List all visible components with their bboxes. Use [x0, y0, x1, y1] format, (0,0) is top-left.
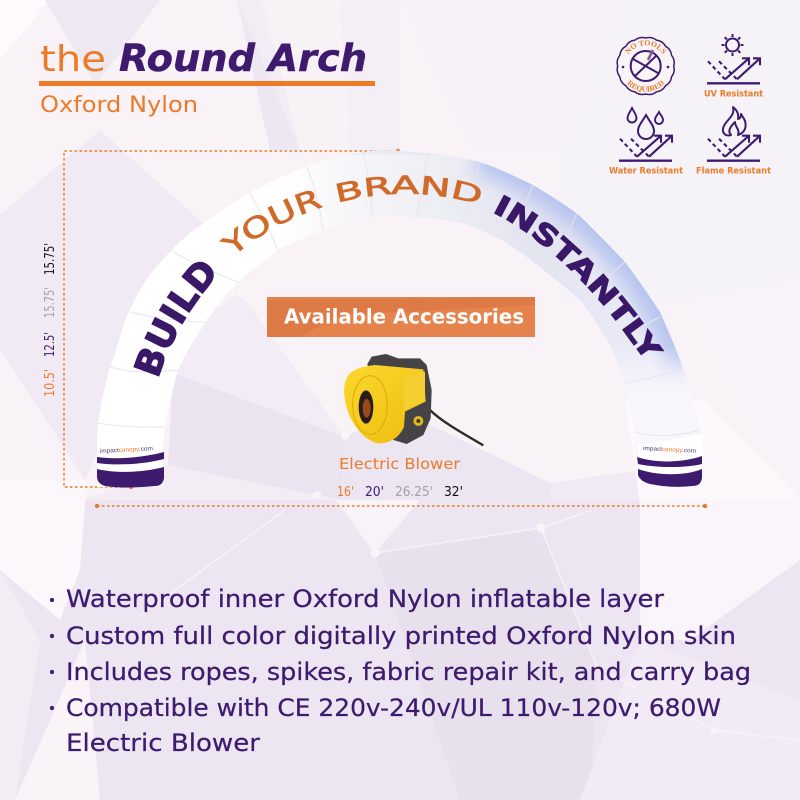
blower body [367, 354, 432, 444]
bullet 3: Includes ropes, spikes, fabric repair kit, and carry bag [66, 658, 751, 686]
height labels: 15.75' [43, 243, 58, 275]
blower housing [344, 365, 426, 443]
accessory label: Electric Blower [339, 455, 461, 473]
feature list [50, 585, 751, 757]
accessories banner: Available Accessories [284, 304, 524, 328]
icon: UV resistant [704, 34, 763, 100]
icon: flame resistant: Flame Resistant [696, 166, 771, 176]
left foot base [97, 467, 164, 488]
blower inlet [359, 390, 373, 424]
right foot url: impactcanopy.com [643, 446, 696, 455]
height labels: 12.5' [43, 332, 58, 357]
icon: flame resistant [696, 107, 771, 176]
length labels [337, 485, 463, 500]
length labels: 26.25' [395, 485, 433, 500]
blower switch [413, 416, 423, 426]
bullet 1: Waterproof inner Oxford Nylon inflatable layer [66, 585, 664, 613]
dimension lines [64, 151, 705, 506]
bullet 4 [50, 694, 721, 757]
icon: no tools required badge: NO TOOLS [624, 40, 666, 54]
arch text: BRAND: BRAND [336, 175, 481, 202]
height labels: 15.75' [43, 287, 58, 318]
dimension end dots [95, 149, 707, 508]
arch text: INSTANTLY: INSTANTLY [494, 194, 664, 356]
right foot stripe [637, 456, 702, 467]
subtitle: Oxford Nylon [40, 93, 198, 118]
blower housing rings [353, 376, 387, 434]
length labels: 32' [444, 485, 463, 500]
right foot base [638, 469, 702, 487]
blower image [344, 354, 483, 445]
bullet 2: Custom full color digitally printed Oxford Nylon skin [66, 622, 736, 650]
length labels: 20' [365, 485, 384, 500]
heading: the: the [40, 39, 106, 80]
height labels: 10.5' [43, 369, 58, 397]
arch [97, 150, 702, 488]
bullet 4: Compatible with CE 220v-240v/UL 110v-120v; 680W [66, 694, 721, 722]
right foot [638, 434, 703, 483]
bullet 4: Electric Blower [66, 729, 260, 757]
arch body [97, 150, 687, 445]
arch text: BUILD: BUILD [133, 262, 214, 377]
length labels: 16' [337, 485, 354, 500]
left foot stripe [97, 452, 164, 464]
arch seams [98, 152, 700, 436]
icon: no tools required badge [616, 36, 675, 96]
arch text: YOUR: YOUR [219, 190, 323, 252]
icon: UV resistant: UV Resistant [704, 90, 763, 100]
height labels [43, 243, 58, 397]
icon: water resistant: Water Resistant [609, 166, 683, 176]
left foot url: impactcanopy.com [100, 446, 153, 455]
left foot [97, 434, 163, 487]
icon: no tools required badge: REQUIRED [626, 80, 664, 92]
title underline [39, 81, 375, 86]
title [39, 37, 375, 118]
accessories banner [267, 297, 535, 337]
power cable [430, 410, 483, 445]
blower duct [403, 372, 425, 411]
heading: Round Arch bold: Round Arch [119, 37, 367, 80]
icon: water resistant [609, 108, 683, 176]
